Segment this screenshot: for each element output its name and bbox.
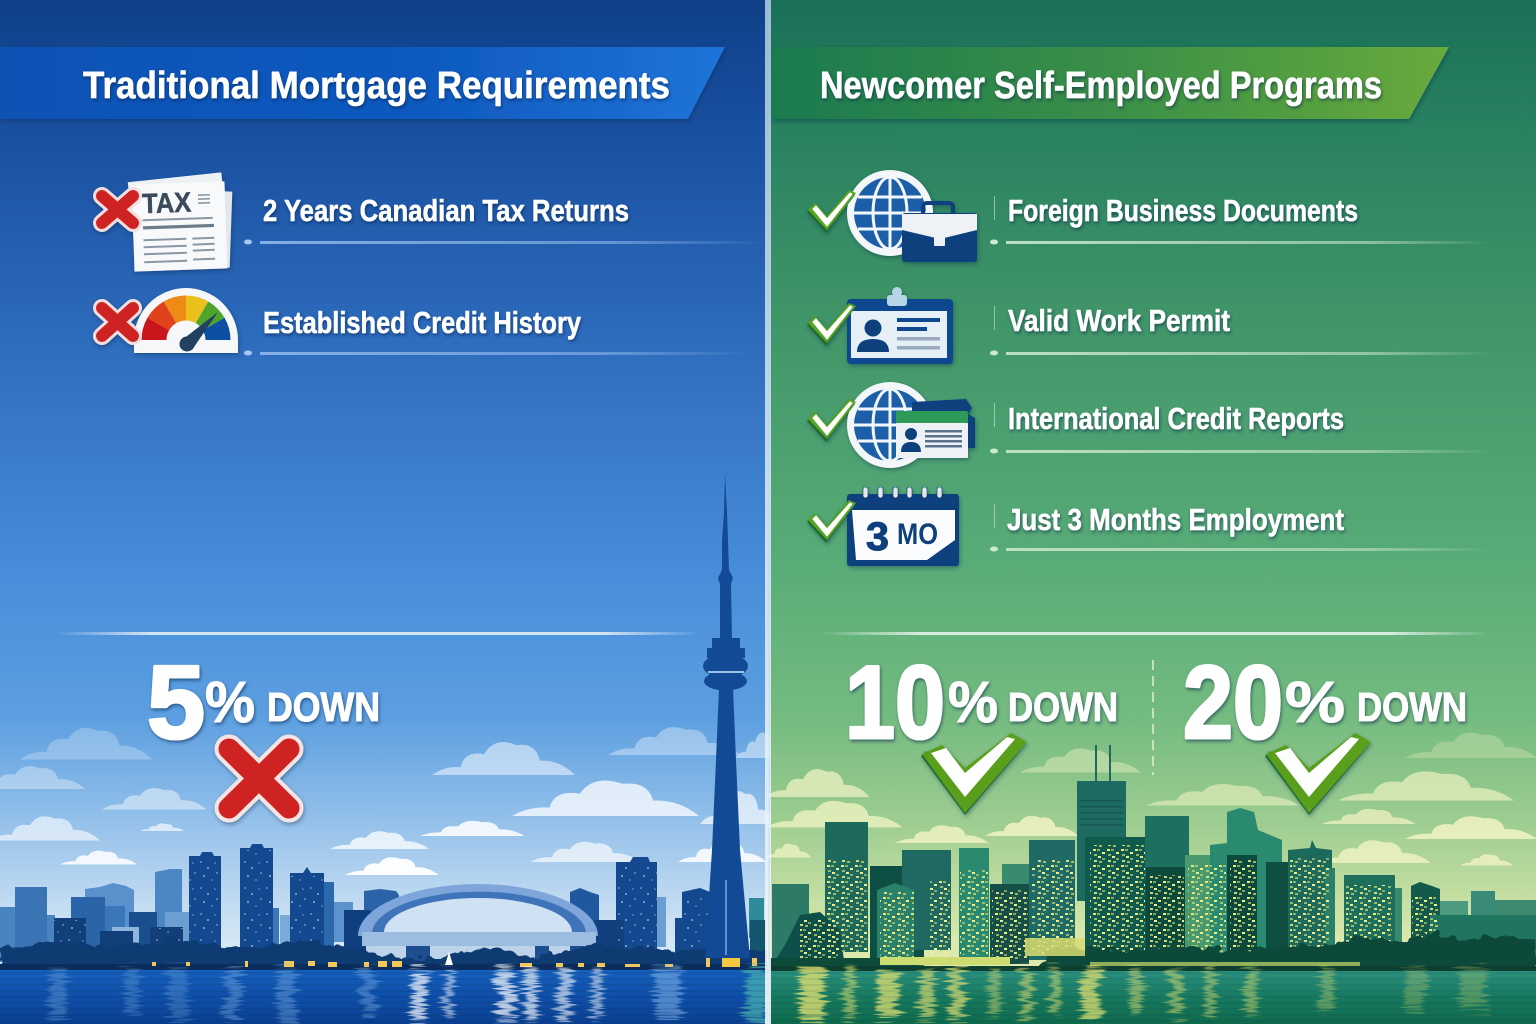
icon: large check 20% [1265, 733, 1371, 815]
icon: calendar 3 mo with check: 3 [866, 515, 889, 559]
divider [244, 350, 750, 356]
stat: 5% down: DOWN [267, 684, 380, 730]
text: credit history: Established Credit History [263, 305, 582, 340]
banner: left [0, 47, 725, 119]
divider [990, 196, 1491, 244]
text: international credit reports: International Credit Reports [1008, 401, 1344, 436]
stat: 10% down: % [948, 670, 998, 735]
icon: tax document with red x: TAX [142, 187, 192, 219]
heading: traditional mortgage requirements: Traditional Mortgage Requirements [83, 65, 670, 107]
text: tax returns: 2 Years Canadian Tax Returns [263, 193, 629, 228]
water: right reflection [770, 968, 1536, 1024]
stat: 10% down: DOWN [1008, 684, 1118, 730]
panel: newcomer self-employed programs [765, 0, 1536, 1024]
requirement: international credit reports [807, 382, 1491, 468]
skyline: green city buildings [770, 745, 1536, 968]
panel: traditional mortgage requirements [0, 0, 790, 1024]
clouds: left sky [0, 727, 790, 875]
text: valid work permit: Valid Work Permit [1008, 303, 1230, 338]
divider rule right [820, 632, 1490, 635]
skyline: toronto buildings [0, 844, 766, 964]
center divider [765, 0, 771, 1024]
icon: tax document with red x [102, 172, 232, 272]
requirement: valid work permit [807, 287, 1491, 364]
icon: large red x [229, 749, 289, 808]
water: left reflection [0, 968, 768, 1024]
tree line and shore [1040, 932, 1536, 972]
icon: id badge with check [807, 287, 953, 364]
banner: right [771, 47, 1449, 119]
stadium dome [358, 884, 598, 962]
heading: newcomer self-employed programs: Newcomer Self-Employed Programs [820, 65, 1382, 107]
stat: 20% down: 20 [1183, 645, 1283, 761]
stat: 20% down [1183, 645, 1467, 761]
skyline windows [54, 850, 710, 960]
requirement: just 3 months employment [807, 487, 1491, 566]
icon: globe and briefcase with check [807, 170, 977, 262]
stat: 20% down: % [1285, 670, 1345, 735]
divider [990, 306, 1491, 356]
stat: 5% down [147, 645, 380, 761]
skyline windows [800, 845, 1438, 962]
icon: calendar 3 mo with check [807, 487, 959, 566]
icon: calendar 3 mo with check: MO [897, 518, 938, 551]
requirement: tax returns [102, 172, 765, 272]
clouds: right sky [765, 733, 1536, 866]
icon: globe and id cards with check [807, 382, 975, 468]
stat: 10% down [845, 645, 1118, 761]
stat: 5% down: % [205, 670, 255, 735]
icon: large check 10% [921, 733, 1027, 815]
requirement: foreign business documents [807, 170, 1491, 262]
center dashed separator [1152, 660, 1154, 775]
stat: 10% down: 10 [845, 645, 945, 761]
stat: 20% down: DOWN [1357, 684, 1467, 730]
shoreline lights [152, 952, 757, 967]
icon: credit gauge with red x [102, 288, 238, 353]
divider [244, 240, 765, 244]
text: foreign business documents: Foreign Business Documents [1008, 193, 1358, 228]
divider [990, 403, 1491, 454]
lit shoreline [770, 938, 1536, 971]
divider [990, 504, 1491, 552]
cn tower [703, 473, 750, 958]
stat: 5% down: 5 [147, 645, 205, 761]
divider rule left [55, 632, 700, 635]
tree line and shore [0, 940, 768, 972]
text: just 3 months employment: Just 3 Months Employment [1007, 502, 1344, 537]
requirement: credit history [102, 288, 750, 356]
